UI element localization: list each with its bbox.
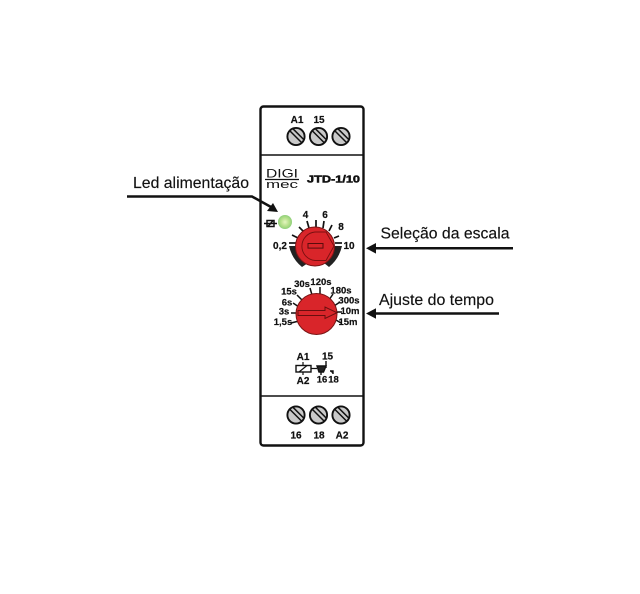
pointer arrow [298, 307, 337, 318]
LED [278, 215, 292, 229]
time knob: 180s [330, 286, 352, 296]
scale knob: 0,2 [273, 241, 287, 252]
brand logo: mec [266, 179, 299, 191]
LED label and arrow: Led alimentação [133, 175, 249, 192]
scale selection callout: Seleção da escala [380, 226, 510, 242]
time knob: 3s [279, 306, 289, 318]
wiring diagram [296, 352, 339, 387]
ticks [289, 220, 342, 243]
icon: relay coil [264, 220, 277, 226]
top terminal block: A1 [291, 115, 304, 126]
time knob: 15m [338, 317, 358, 328]
time knob: 1,5s [274, 317, 292, 328]
bottom terminal block [287, 406, 350, 442]
time knob: 15s [281, 286, 297, 298]
time knob: 6s [282, 298, 292, 308]
brand logo [265, 166, 299, 191]
brand logo: DIGI [266, 166, 298, 180]
scale knob: 10 [343, 241, 355, 252]
top terminal block: 15 [313, 115, 325, 126]
scale knob [273, 210, 355, 267]
wiring diagram: A1 [297, 352, 310, 363]
wiring diagram: 16 [317, 374, 327, 386]
wiring diagram: 15 [322, 352, 333, 362]
wiring diagram: A2 [297, 376, 310, 387]
time knob: 120s [310, 277, 332, 288]
bottom terminal block: 16 [290, 430, 302, 442]
scale knob: 6 [322, 210, 328, 221]
pointer outline [302, 232, 334, 260]
LED label and arrow [127, 175, 278, 212]
device body [260, 106, 364, 446]
scale selection callout [366, 226, 513, 254]
top terminal block [287, 115, 350, 145]
bottom terminal block: A2 [336, 430, 349, 442]
model name: JTD-1/10 [307, 174, 360, 186]
time adjust callout [366, 292, 499, 319]
scale knob: 8 [338, 222, 344, 233]
time knob [274, 277, 360, 334]
wiring diagram: 18 [328, 374, 339, 386]
time knob: 30s [294, 279, 310, 290]
scale knob: 4 [303, 210, 309, 221]
time knob: 10m [340, 306, 360, 317]
black arcs [289, 246, 308, 267]
bottom terminal block: 18 [313, 430, 325, 442]
time knob: 300s [338, 296, 360, 306]
time adjust callout: Ajuste do tempo [379, 292, 494, 309]
